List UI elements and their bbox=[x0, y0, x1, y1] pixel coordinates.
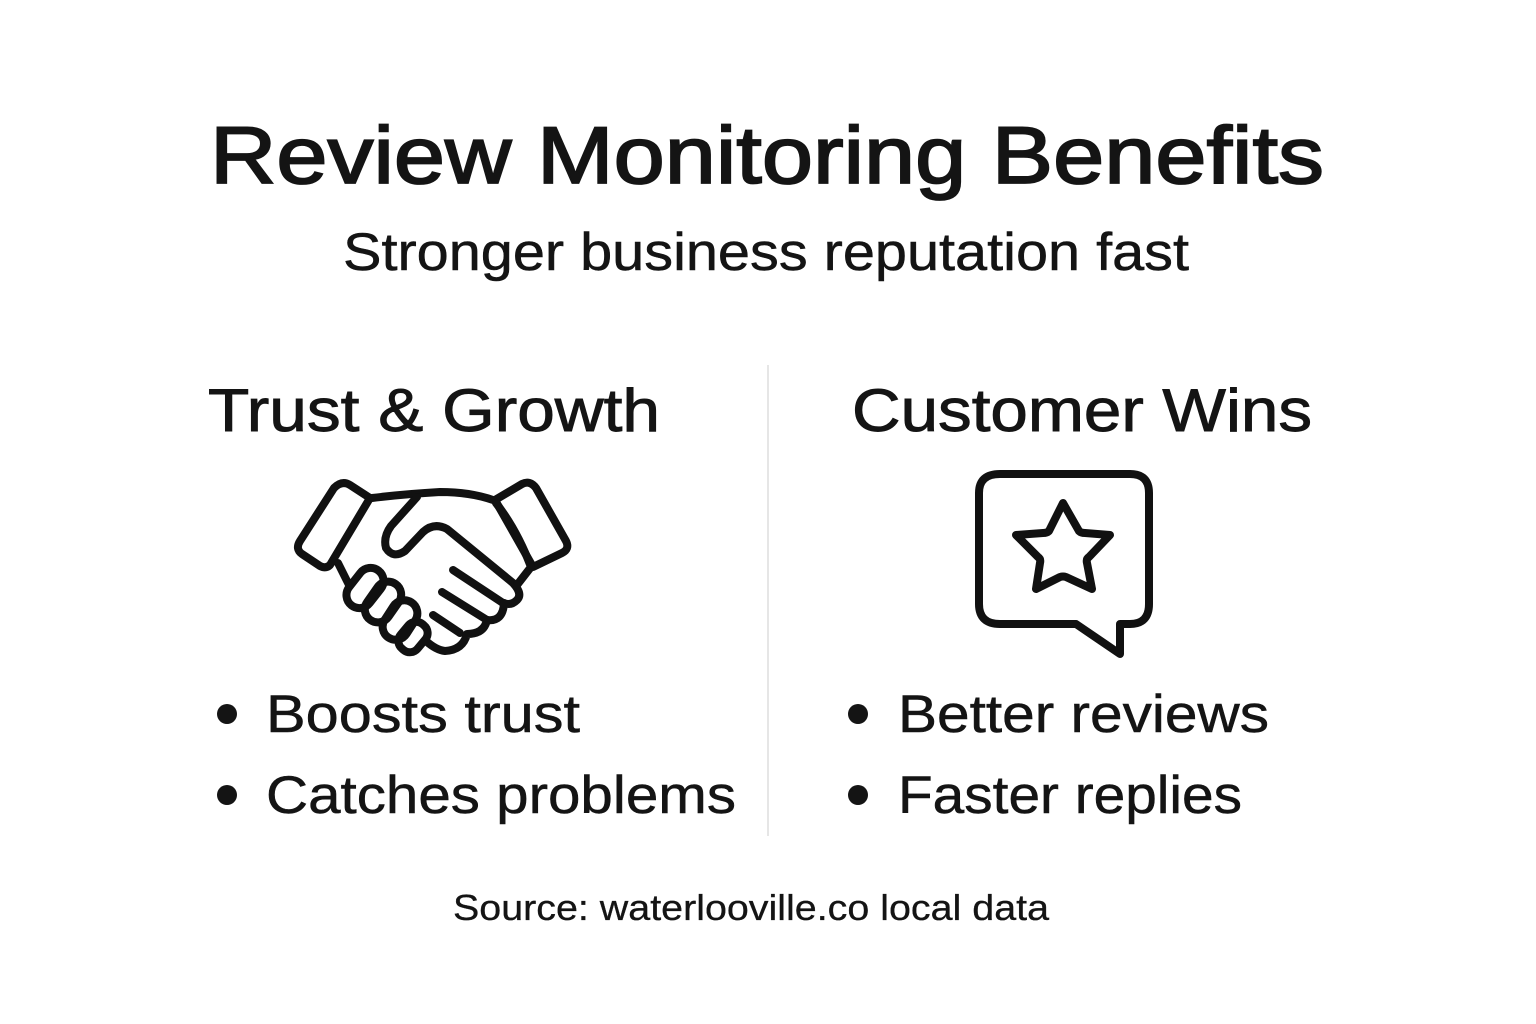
panel: customer wins bbox=[848, 377, 1312, 825]
panel: trust and growth bbox=[208, 377, 736, 825]
source note: Source: waterlooville.co local data bbox=[453, 887, 1050, 928]
bullet: better reviews: Better reviews bbox=[898, 685, 1269, 744]
icon: handshake bbox=[298, 483, 567, 656]
bullet: faster replies: Faster replies bbox=[898, 766, 1242, 825]
bullet: catches problems: Catches problems bbox=[266, 766, 736, 825]
title: Review Monitoring Benefits bbox=[210, 111, 1324, 201]
icon: speech bubble with star bbox=[979, 474, 1149, 654]
subtitle: Stronger business reputation fast bbox=[343, 223, 1189, 282]
heading: trust and growth: Trust & Growth bbox=[208, 377, 660, 444]
bullet: boosts trust: Boosts trust bbox=[266, 685, 580, 744]
heading: customer wins: Customer Wins bbox=[852, 377, 1312, 444]
